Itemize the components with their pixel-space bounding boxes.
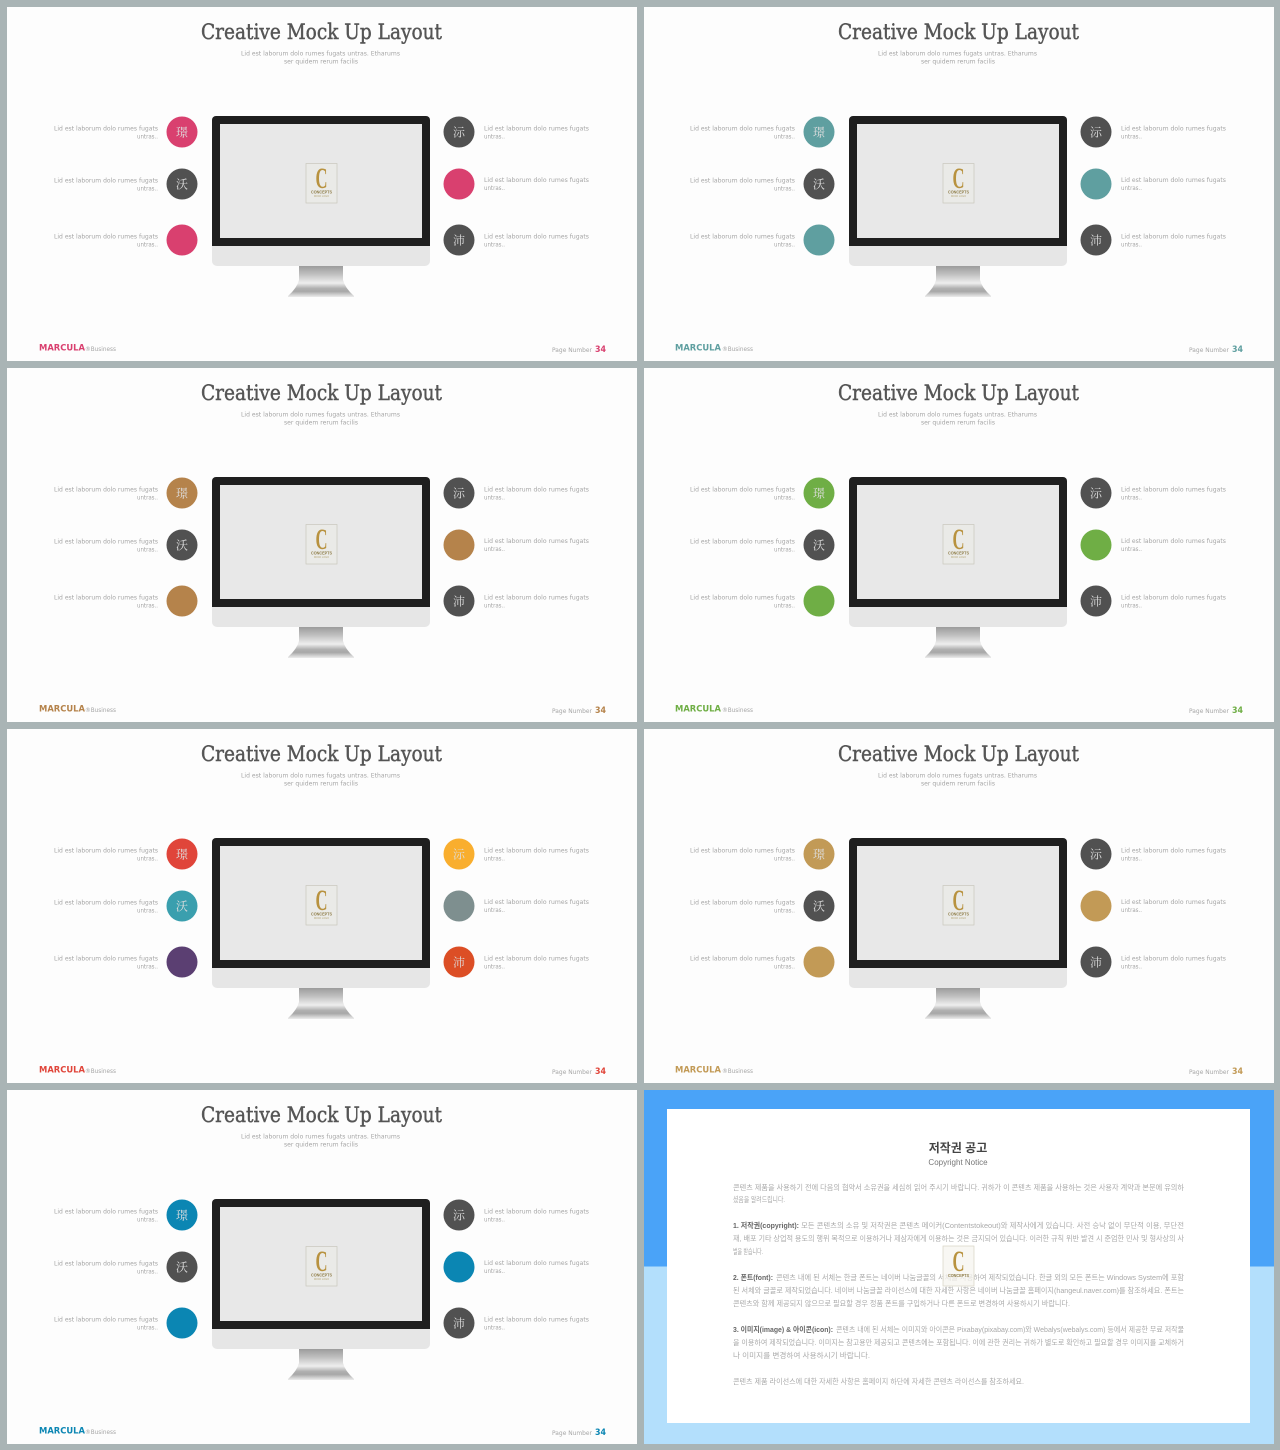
slide 3 right icons: 沶 xyxy=(453,484,466,502)
slide 2 left captions: untras.. xyxy=(774,186,795,192)
copyright section 3: 3. 이미지(image) & 아이콘(icon): xyxy=(733,1324,833,1334)
slide 3 right captions xyxy=(484,486,589,610)
slide 1 monitor: MOCK LOGO xyxy=(314,194,329,198)
slide 2 title: Creative Mock Up Layout xyxy=(838,20,1079,44)
slide 5 right captions xyxy=(484,848,589,970)
copyright section 3 xyxy=(733,1324,1184,1360)
slide 5: multicolour xyxy=(7,729,637,1083)
slide 2 left captions: Lid est laborum dolo rumes fugats xyxy=(690,178,795,184)
slide 4 subtitle xyxy=(878,412,1037,426)
copyright section 2 xyxy=(733,1272,1184,1308)
slide 3 left icons: 沃 xyxy=(176,536,188,554)
slide 4 left captions: Lid est laborum dolo rumes fugats xyxy=(690,594,795,602)
slide 1 left captions: Lid est laborum dolo rumes fugats xyxy=(54,126,158,132)
slide 7 monitor xyxy=(212,1199,430,1380)
slide 4 right captions xyxy=(1121,486,1226,610)
slide 2 monitor: CONCEPTS xyxy=(948,190,969,194)
slide 4 left captions: untras.. xyxy=(774,602,795,610)
copyright heading: Copyright Notice xyxy=(928,1158,988,1167)
slide 4 right captions: Lid est laborum dolo rumes fugats xyxy=(1121,594,1226,602)
copyright heading xyxy=(928,1140,988,1167)
slide 1 right captions: untras.. xyxy=(484,185,505,192)
slide 3 footer: MARCULA xyxy=(39,704,85,714)
slide 3: brown xyxy=(7,368,637,722)
slide 2 left icons: 璟 xyxy=(813,124,825,140)
slide 6 left icons: 璟 xyxy=(813,846,825,862)
copyright section 2: 콘텐츠와 함께 제공되지 않으므로 필요할 경우 정품 폰트를 구입하거나 다른 폰트로 변경하여 사용하시기 바랍니다. xyxy=(733,1298,1070,1308)
slide 3 left captions: Lid est laborum dolo rumes fugats xyxy=(54,538,158,546)
copyright section 2: 2. 폰트(font): xyxy=(733,1273,773,1282)
slide 4 monitor: C xyxy=(952,523,964,556)
slide 1 right captions: Lid est laborum dolo rumes fugats xyxy=(484,177,589,184)
slide 7 monitor: CONCEPTS xyxy=(311,1272,332,1278)
slide 7 left icons: 璟 xyxy=(176,1206,188,1224)
slide 7 monitor: MOCK LOGO xyxy=(314,1277,329,1281)
slide 7 left icons: 沃 xyxy=(176,1258,188,1276)
slide 4 right icons xyxy=(1080,478,1112,616)
slide 2 right icons: 沛 xyxy=(1090,232,1102,248)
slide 2 left captions xyxy=(690,126,795,248)
copyright intro: 콘텐츠 제품을 사용하기 전에 다음의 협약서 소유권을 세심히 읽어 주시기 바랍니다. 귀하가 이 콘텐츠 제품을 사용하는 것은 사용자 계약과 본문에 유의하 xyxy=(733,1182,1184,1192)
slide 3 monitor: MOCK LOGO xyxy=(314,555,329,559)
slide 7 right captions: untras.. xyxy=(484,1324,505,1332)
slide 7 right icons: 沶 xyxy=(453,1206,466,1224)
slide 2: teal xyxy=(644,7,1274,361)
slide 2 right captions xyxy=(1121,126,1226,248)
slide 3 right icons: 沛 xyxy=(453,592,465,610)
slide 6 subtitle: ser quidem rerum facilis xyxy=(921,780,995,788)
slide 3 subtitle: ser quidem rerum facilis xyxy=(284,420,358,426)
slide 6 right icons: 沶 xyxy=(1090,846,1103,862)
slide 1 right icons: 沛 xyxy=(453,232,465,248)
slide 3 left captions xyxy=(54,486,158,610)
slide 6 left captions: Lid est laborum dolo rumes fugats xyxy=(690,956,795,962)
slide 2 right icons xyxy=(1080,116,1112,256)
slide 1 right captions: untras.. xyxy=(484,134,505,140)
slide 4 footer xyxy=(675,704,1243,716)
copyright section 1: 벌을 받습니다. xyxy=(733,1246,763,1256)
slide 4 left icons: 璟 xyxy=(813,484,825,502)
slide 5 right icons: 沶 xyxy=(453,846,466,862)
slide 5 monitor: MOCK LOGO xyxy=(314,916,329,920)
slide 1 left captions: untras.. xyxy=(137,242,158,248)
slide 7 right icons xyxy=(444,1200,474,1338)
slide 1 subtitle xyxy=(241,50,400,66)
slide 1 right captions xyxy=(484,126,589,248)
slide 7 right icons: 沛 xyxy=(453,1314,465,1332)
slide 7 footer: MARCULA xyxy=(39,1426,85,1436)
slide 6 right captions: untras.. xyxy=(1121,907,1142,914)
slide 1 right captions: Lid est laborum dolo rumes fugats xyxy=(484,126,589,132)
copyright section 3: 콘텐츠 내에 된 서체는 이미지와 아이콘은 Pixabay(pixabay.com)와 Webalys(webalys.com) 등에서 제공한 무료 저작물 xyxy=(836,1324,1184,1334)
copyright section 3: 나 이미지를 변경하여 사용하시기 바랍니다. xyxy=(733,1350,870,1360)
slide 5 right icons xyxy=(444,838,474,978)
slide 1 left icons xyxy=(166,116,198,256)
slide 3 right captions: untras.. xyxy=(484,546,505,553)
slide 1 left captions: Lid est laborum dolo rumes fugats xyxy=(54,178,158,184)
slide 3 subtitle xyxy=(241,412,400,426)
slide 6 footer: 34 xyxy=(1232,1067,1243,1077)
slide 1 right captions: Lid est laborum dolo rumes fugats xyxy=(484,234,589,240)
slide 5 left icons xyxy=(166,838,198,978)
slide 2 footer xyxy=(675,344,1243,355)
slide 2 right captions: Lid est laborum dolo rumes fugats xyxy=(1121,234,1226,240)
slide 5 left captions: Lid est laborum dolo rumes fugats xyxy=(54,900,158,906)
slide 6 right captions: untras.. xyxy=(1121,856,1142,862)
slide 6 left captions: untras.. xyxy=(774,964,795,970)
copyright section 2: 콘텐츠 내에 된 서체는 한글 폰트는 네이버 나눔글꼴의 서체를 사용하여 제작되었습니다. 한글 외의 모든 폰트는 Windows System에 포함 xyxy=(776,1272,1184,1282)
slide 1 footer xyxy=(39,344,606,355)
slide 5 right captions: Lid est laborum dolo rumes fugats xyxy=(484,848,589,854)
slide 3 footer: ®Business xyxy=(85,707,116,714)
slide 4 left captions: Lid est laborum dolo rumes fugats xyxy=(690,538,795,546)
slide 6 right captions: Lid est laborum dolo rumes fugats xyxy=(1121,848,1226,854)
slide 7 right captions: untras.. xyxy=(484,1268,505,1275)
slide 2 right captions: untras.. xyxy=(1121,242,1142,248)
slide 7 subtitle: ser quidem rerum facilis xyxy=(284,1142,358,1148)
slide 6 right captions: Lid est laborum dolo rumes fugats xyxy=(1121,899,1226,906)
slide 2 left captions: Lid est laborum dolo rumes fugats xyxy=(690,126,795,132)
copyright section 1: 1. 저작권(copyright): xyxy=(733,1220,799,1230)
slide 6 footer: MARCULA xyxy=(675,1066,721,1076)
watermark logo xyxy=(943,1245,974,1286)
slide 4 footer: Page Number xyxy=(1189,708,1230,715)
slide 2 monitor: MOCK LOGO xyxy=(951,194,966,198)
slide 5 left icons: 沃 xyxy=(176,898,188,914)
slide 2 right icons: 沶 xyxy=(1090,124,1103,140)
slide 1 right icons: 沶 xyxy=(453,124,466,140)
slide 4 right icons: 沛 xyxy=(1090,592,1102,610)
slide 4 left captions xyxy=(690,486,795,610)
slide 2 monitor: C xyxy=(952,162,964,195)
slide 3 footer xyxy=(39,704,606,716)
slide 1 left icons: 璟 xyxy=(176,124,188,140)
slide 6 right icons xyxy=(1080,838,1112,978)
slide 1 right icons xyxy=(444,116,474,256)
slide 5 left captions: untras.. xyxy=(137,856,158,862)
slide 5 left icons: 璟 xyxy=(176,846,188,862)
slide 6 right icons: 沛 xyxy=(1090,954,1102,970)
slide 3 monitor xyxy=(212,477,430,658)
slide 7 monitor: C xyxy=(316,1245,328,1278)
slide 6 footer: Page Number xyxy=(1189,1069,1230,1076)
slide 1 left captions: untras.. xyxy=(137,186,158,192)
slide 2 right captions: untras.. xyxy=(1121,134,1142,140)
slide 4 left captions: untras.. xyxy=(774,546,795,554)
copyright section 1: 모든 콘텐츠의 소유 및 저작권은 콘텐츠 메이커(Contentstokeout)와 제작사에게 있습니다. 사전 승낙 없이 무단적 이용, 무단전 xyxy=(801,1220,1184,1230)
slide 3 right icons xyxy=(444,478,474,616)
slide 4 left icons: 沃 xyxy=(813,536,825,554)
copyright section 1 xyxy=(733,1220,1184,1256)
copyright section 1: 재, 배포 기타 상업적 용도의 행위 목적으로 이용하거나 제삼자에게 이용하는 것은 금지되어 있습니다. 이러한 규칙 위반 발견 시 준엄한 민사 및 형사상의 사 xyxy=(733,1233,1184,1243)
slide 1 left captions xyxy=(54,126,158,248)
slide 2 left icons xyxy=(804,116,834,256)
slide 5 left captions xyxy=(54,848,158,970)
slide 6 left captions: untras.. xyxy=(774,908,795,914)
slide 3 right captions: untras.. xyxy=(484,602,505,610)
slide 3 left captions: untras.. xyxy=(137,602,158,610)
slide 4 monitor: MOCK LOGO xyxy=(951,555,966,559)
slide 5 footer: ®Business xyxy=(85,1068,116,1075)
slide 5 subtitle xyxy=(241,772,400,788)
slide 6 right captions: untras.. xyxy=(1121,964,1142,970)
slide 4 right captions: untras.. xyxy=(1121,494,1142,502)
slide 3 left icons: 璟 xyxy=(176,484,188,502)
slide 7 right captions: Lid est laborum dolo rumes fugats xyxy=(484,1316,589,1324)
slide 5 right captions: untras.. xyxy=(484,856,505,862)
slide 1 subtitle: ser quidem rerum facilis xyxy=(284,58,358,66)
slide 3 left captions: Lid est laborum dolo rumes fugats xyxy=(54,486,158,494)
slide 5 footer xyxy=(39,1066,606,1077)
slide 6 right captions xyxy=(1121,848,1226,970)
slide 7 footer: Page Number xyxy=(552,1430,593,1437)
slide 7 subtitle: Lid est laborum dolo rumes fugats untras. Etharums xyxy=(241,1134,400,1140)
copyright intro: 셨음을 알려드립니다. xyxy=(733,1194,785,1204)
slide 2 right captions: untras.. xyxy=(1121,185,1142,192)
slide 2 left icons: 沃 xyxy=(813,176,825,192)
slide 6 monitor: CONCEPTS xyxy=(948,912,969,916)
slide 1 subtitle: Lid est laborum dolo rumes fugats untras. Etharums xyxy=(241,50,400,58)
slide 4 footer: 34 xyxy=(1232,706,1243,716)
slide 2 monitor xyxy=(849,116,1067,297)
slide 6 left captions: Lid est laborum dolo rumes fugats xyxy=(690,848,795,854)
slide 6 title: Creative Mock Up Layout xyxy=(838,742,1079,766)
slide 3 right captions: Lid est laborum dolo rumes fugats xyxy=(484,538,589,545)
slide 1 left icons: 沃 xyxy=(176,176,188,192)
slide 5 title: Creative Mock Up Layout xyxy=(201,742,442,766)
slide 5 footer: 34 xyxy=(595,1067,606,1077)
slide 1 title: Creative Mock Up Layout xyxy=(201,20,442,44)
slide 5 left captions: untras.. xyxy=(137,908,158,914)
slide 4 right captions: Lid est laborum dolo rumes fugats xyxy=(1121,486,1226,494)
slide 3 subtitle: Lid est laborum dolo rumes fugats untras. Etharums xyxy=(241,412,400,418)
slide 6 left icons: 沃 xyxy=(813,898,825,914)
slide 2 subtitle: ser quidem rerum facilis xyxy=(921,58,995,66)
slide 6 monitor: MOCK LOGO xyxy=(951,916,966,920)
slide 3 left icons xyxy=(166,478,198,616)
slide 3 footer: Page Number xyxy=(552,708,593,715)
copyright section 2: 된 서체와 글꼴로 제작되었습니다. 네이버 나눔글꼴 라이선스에 대한 자세한 사항은 네이버 나눔글꼴 홈페이지(hangeul.naver.com)를 참조하세요. 폰트는 xyxy=(733,1285,1184,1295)
slide 1 monitor xyxy=(212,116,430,297)
slide 2 subtitle: Lid est laborum dolo rumes fugats untras. Etharums xyxy=(878,50,1037,58)
slide 5 left captions: Lid est laborum dolo rumes fugats xyxy=(54,956,158,962)
slide 1 monitor: C xyxy=(316,162,328,195)
slide 2 footer: 34 xyxy=(1232,345,1243,355)
slide 7 left captions: untras.. xyxy=(137,1216,158,1224)
slide 4 monitor: CONCEPTS xyxy=(948,550,969,556)
slide 5 monitor: C xyxy=(316,884,328,917)
slide 3 left captions: Lid est laborum dolo rumes fugats xyxy=(54,594,158,602)
slide 1 monitor: CONCEPTS xyxy=(311,190,332,194)
slide 2 right captions: Lid est laborum dolo rumes fugats xyxy=(1121,126,1226,132)
slide 3 right captions: Lid est laborum dolo rumes fugats xyxy=(484,594,589,602)
slide 5 left captions: untras.. xyxy=(137,964,158,970)
slide 6 left captions: Lid est laborum dolo rumes fugats xyxy=(690,900,795,906)
slide 3 left captions: untras.. xyxy=(137,546,158,554)
slide 6 monitor xyxy=(849,838,1067,1019)
slide 3 monitor: CONCEPTS xyxy=(311,550,332,556)
slide 2 footer: MARCULA xyxy=(675,344,721,354)
watermark logo: C xyxy=(952,1245,964,1278)
slide 5 right captions: Lid est laborum dolo rumes fugats xyxy=(484,956,589,962)
slide 1 footer: ®Business xyxy=(85,346,116,353)
slide 5 right captions: Lid est laborum dolo rumes fugats xyxy=(484,899,589,906)
slide 2 left captions: untras.. xyxy=(774,242,795,248)
slide 1 footer: 34 xyxy=(595,345,606,355)
slide 4 monitor xyxy=(849,477,1067,658)
slide 7: blue xyxy=(7,1090,637,1444)
slide 2 right captions: Lid est laborum dolo rumes fugats xyxy=(1121,177,1226,184)
slide 5 footer: MARCULA xyxy=(39,1066,85,1076)
slide 2 footer: Page Number xyxy=(1189,347,1230,354)
slide 5 monitor xyxy=(212,838,430,1019)
slide 1 left captions: Lid est laborum dolo rumes fugats xyxy=(54,234,158,240)
slide 2 footer: ®Business xyxy=(722,346,753,353)
slide 6 left captions: untras.. xyxy=(774,856,795,862)
slide 7 right captions xyxy=(484,1208,589,1332)
slide 7 left captions xyxy=(54,1208,158,1332)
slide 2 left captions: Lid est laborum dolo rumes fugats xyxy=(690,234,795,240)
slide 1 footer: MARCULA xyxy=(39,344,85,354)
slide 4 footer: ®Business xyxy=(722,707,753,714)
slide 6 footer xyxy=(675,1066,1243,1077)
slide 4 left captions: Lid est laborum dolo rumes fugats xyxy=(690,486,795,494)
slide 7 left captions: Lid est laborum dolo rumes fugats xyxy=(54,1316,158,1324)
slide 7 left captions: Lid est laborum dolo rumes fugats xyxy=(54,1208,158,1216)
slide 6 left icons xyxy=(804,838,834,978)
slide 4 title: Creative Mock Up Layout xyxy=(838,381,1079,405)
slide 5 monitor: CONCEPTS xyxy=(311,912,332,916)
slide 4 left captions: untras.. xyxy=(774,494,795,502)
slide 7 footer: 34 xyxy=(595,1428,606,1438)
slide 7 title: Creative Mock Up Layout xyxy=(201,1103,442,1127)
slide 5 footer: Page Number xyxy=(552,1069,593,1076)
slide 4 subtitle: Lid est laborum dolo rumes fugats untras. Etharums xyxy=(878,412,1037,418)
copyright closing line: 콘텐츠 제품 라이선스에 대한 자세한 사항은 홈페이지 하단에 자세한 콘텐츠 라이선스를 참조하세요. xyxy=(733,1376,1024,1386)
slide 2 subtitle xyxy=(878,50,1037,66)
slide 4 subtitle: ser quidem rerum facilis xyxy=(921,420,995,426)
watermark logo: CONCEPTS xyxy=(948,1273,969,1278)
slide 5 right captions: untras.. xyxy=(484,907,505,914)
slide 3 title: Creative Mock Up Layout xyxy=(201,381,442,405)
slide 7 left captions: Lid est laborum dolo rumes fugats xyxy=(54,1260,158,1268)
slide 3 footer: 34 xyxy=(595,706,606,716)
slide 3 right captions: Lid est laborum dolo rumes fugats xyxy=(484,486,589,494)
slide 4 footer: MARCULA xyxy=(675,704,721,714)
slide 3 left captions: untras.. xyxy=(137,494,158,502)
slide 1 left captions: untras.. xyxy=(137,134,158,140)
slide 7 right captions: untras.. xyxy=(484,1216,505,1224)
slide 4 left icons xyxy=(804,478,834,616)
slide 5 right icons: 沛 xyxy=(453,954,465,970)
slide 6 monitor: C xyxy=(952,884,964,917)
slide 3 monitor: C xyxy=(316,523,328,556)
slide 7 footer xyxy=(39,1426,606,1438)
slide 5 subtitle: ser quidem rerum facilis xyxy=(284,780,358,788)
slide 7 footer: ®Business xyxy=(85,1429,116,1436)
slide 5 subtitle: Lid est laborum dolo rumes fugats untras. Etharums xyxy=(241,772,400,780)
slide 7 left captions: untras.. xyxy=(137,1324,158,1332)
slide 7 left icons xyxy=(166,1200,198,1338)
slide 6 left captions xyxy=(690,848,795,970)
slide 1 footer: Page Number xyxy=(552,347,593,354)
slide 7 subtitle xyxy=(241,1134,400,1148)
slide 5 left captions: Lid est laborum dolo rumes fugats xyxy=(54,848,158,854)
copyright intro xyxy=(733,1182,1184,1204)
slide 7 left captions: untras.. xyxy=(137,1268,158,1276)
copyright section 3: 을 이용하여 제작되었습니다. 이미지는 참고용만 제공되고 콘텐츠에는 포함됩니다. 이에 관한 권리는 귀하가 별도로 확인하고 필요할 경우 이미지를 교체하거 xyxy=(733,1337,1184,1347)
slide 4 right captions: untras.. xyxy=(1121,546,1142,553)
slide 6 right captions: Lid est laborum dolo rumes fugats xyxy=(1121,956,1226,962)
slide 5 right captions: untras.. xyxy=(484,964,505,970)
slide 6: tan xyxy=(644,729,1274,1083)
slide 4: green xyxy=(644,368,1274,722)
slide 6 footer: ®Business xyxy=(722,1068,753,1075)
slide 7 right captions: Lid est laborum dolo rumes fugats xyxy=(484,1260,589,1267)
slide 1 right captions: untras.. xyxy=(484,242,505,248)
slide 2 left captions: untras.. xyxy=(774,134,795,140)
slide 4 right captions: untras.. xyxy=(1121,602,1142,610)
slide 3 right captions: untras.. xyxy=(484,494,505,502)
slide 8: copyright notice xyxy=(644,1090,1274,1444)
slide 7 right captions: Lid est laborum dolo rumes fugats xyxy=(484,1208,589,1216)
slide 6 subtitle xyxy=(878,772,1037,788)
slide 6 subtitle: Lid est laborum dolo rumes fugats untras. Etharums xyxy=(878,772,1037,780)
slide 1: pink xyxy=(7,7,637,361)
slide 4 right icons: 沶 xyxy=(1090,484,1103,502)
slide 4 right captions: Lid est laborum dolo rumes fugats xyxy=(1121,538,1226,545)
copyright heading: 저작권 공고 xyxy=(929,1140,987,1155)
